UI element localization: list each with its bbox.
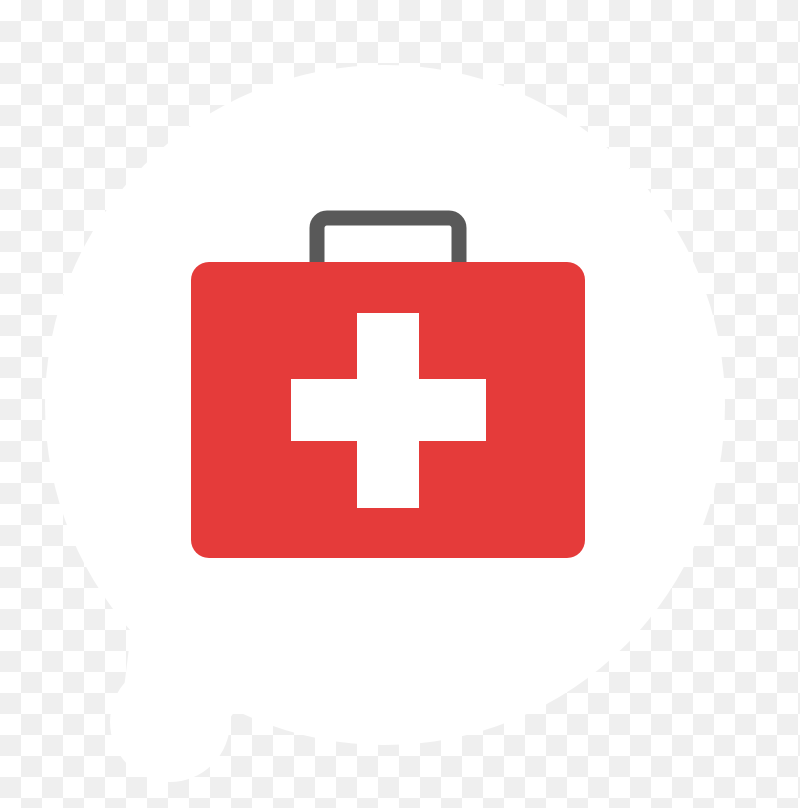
icon: first aid kit	[191, 218, 585, 558]
white cross	[291, 313, 486, 508]
kit handle	[317, 218, 459, 262]
speech bubble	[45, 65, 725, 782]
kit body	[191, 262, 585, 558]
